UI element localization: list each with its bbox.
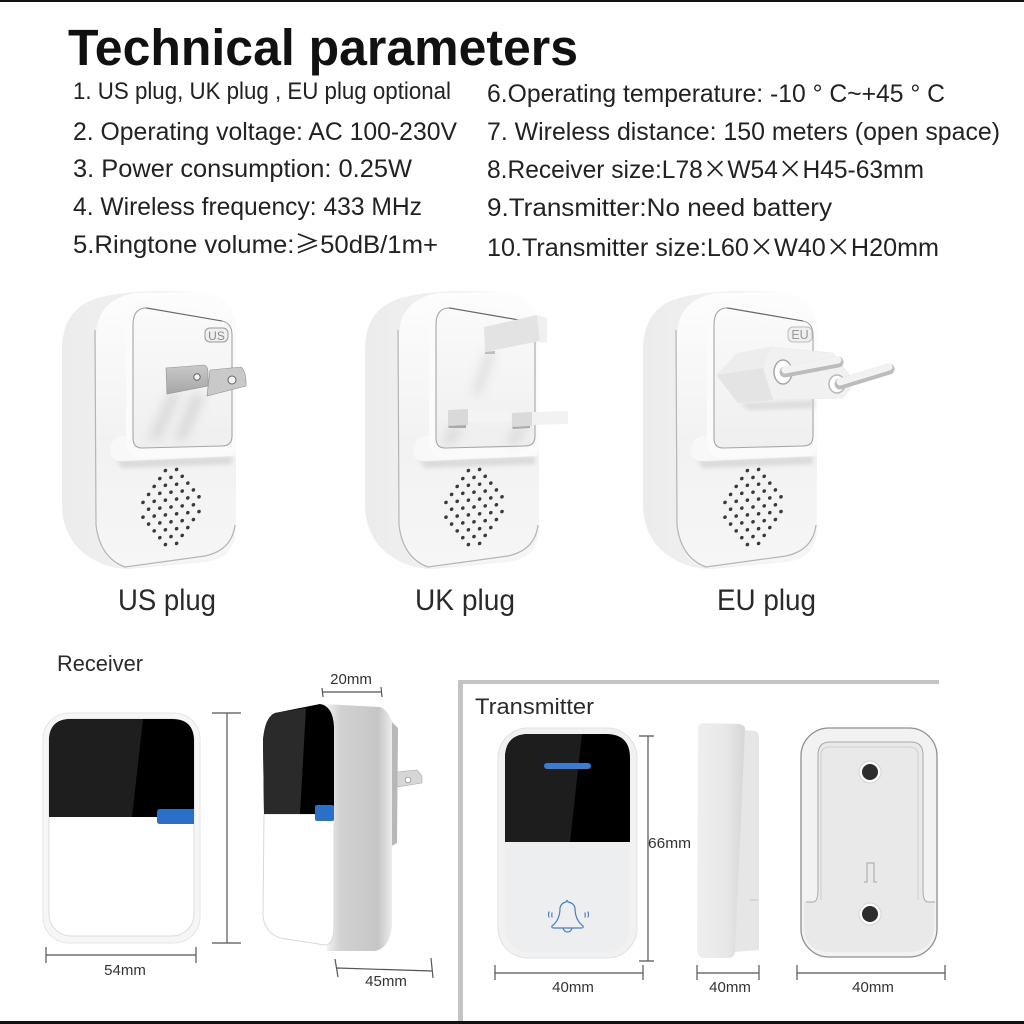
receiver: side view bbox=[263, 704, 422, 951]
pins bbox=[785, 360, 889, 384]
dimension: 66mm height: 66mm bbox=[648, 835, 691, 852]
badge: EU: EU bbox=[791, 328, 809, 342]
top border line bbox=[0, 0, 1024, 2]
prongs: three UK blades bbox=[448, 315, 568, 429]
black display panel bbox=[49, 719, 194, 817]
transmitter: front view bbox=[498, 728, 637, 958]
prong bbox=[397, 770, 422, 787]
parameters list: left column: 1. US plug, UK plug , EU plug optional bbox=[73, 78, 451, 105]
product photo: UK plug receiver bbox=[365, 291, 568, 569]
upper screw hole bbox=[859, 761, 881, 783]
heading: Transmitter: Transmitter bbox=[475, 694, 594, 719]
blue indicator bbox=[157, 809, 194, 824]
mounting plate bbox=[804, 742, 934, 952]
parameters list: left column: 2. Operating voltage: AC 100-230V bbox=[73, 118, 457, 146]
prongs: flat US blades bbox=[166, 365, 246, 396]
blue LED bar bbox=[544, 763, 591, 769]
product photo: EU plug receiver bbox=[643, 291, 889, 569]
black display panel bbox=[505, 734, 630, 842]
front face lower white bbox=[263, 814, 334, 945]
side housing bbox=[323, 704, 392, 951]
badge: US: US bbox=[208, 329, 225, 343]
rear plug housing bbox=[388, 718, 398, 848]
parameters list: right column: 7. Wireless distance: 150 meters (open space) bbox=[487, 118, 1000, 146]
transmitter: side view bbox=[697, 723, 759, 958]
plug shadow bbox=[740, 400, 815, 410]
label: US plug: US plug bbox=[118, 584, 216, 617]
transmitter: back view bbox=[801, 728, 937, 957]
parameters list: right column: 9.Transmitter:No need battery bbox=[487, 194, 833, 222]
prong shadows bbox=[148, 391, 206, 440]
black display bbox=[263, 704, 334, 814]
dimension: transmitter side 40mm bbox=[697, 965, 759, 996]
badge: EU bbox=[788, 327, 812, 342]
dimension: transmitter back 40mm: 40mm bbox=[852, 979, 894, 996]
parameters list: right column: 8.Receiver size:L78×W54×H45-63mm bbox=[487, 150, 924, 186]
plug body: EU two-pin bbox=[716, 347, 889, 403]
orientation mark bbox=[864, 863, 877, 882]
parameters list: right column: 6.Operating temperature: -10 ° C~+45 ° C bbox=[487, 80, 945, 108]
dimension: 54mm width: 54mm bbox=[104, 962, 146, 979]
parameters list: left column: 3. Power consumption: 0.25W bbox=[73, 155, 412, 183]
icon: bell bbox=[548, 900, 588, 932]
lower screw hole bbox=[859, 903, 881, 925]
dimension: transmitter side 40mm: 40mm bbox=[709, 979, 751, 996]
parameters list: right column bbox=[487, 80, 1000, 264]
label: EU plug: EU plug bbox=[717, 584, 816, 617]
dimension: 20mm depth: 20mm bbox=[330, 671, 372, 688]
parameters list: left column: 4. Wireless frequency: 433 MHz bbox=[73, 193, 422, 221]
dimension: 45mm depth bbox=[335, 958, 433, 990]
dimension: transmitter front 40mm bbox=[495, 965, 643, 996]
parameters list: right column: 10.Transmitter size:L60×W40×H20mm bbox=[487, 228, 939, 264]
parameters list: left column bbox=[73, 78, 457, 261]
dimension: transmitter back 40mm bbox=[797, 965, 945, 996]
badge: US bbox=[205, 328, 228, 343]
dimension: 45mm depth: 45mm bbox=[365, 973, 407, 990]
heading: Receiver: Receiver bbox=[57, 651, 143, 676]
dimension: 54mm width bbox=[46, 947, 196, 979]
dimension: transmitter front 40mm: 40mm bbox=[552, 979, 594, 996]
bottom border line bbox=[0, 1021, 1024, 1024]
parameters list: left column: 5.Ringtone volume:≥50dB/1m+ bbox=[73, 225, 438, 261]
label: UK plug: UK plug bbox=[415, 584, 515, 617]
dimension: receiver height bbox=[212, 713, 241, 943]
transmitter panel frame bbox=[458, 680, 939, 1021]
dimension: 66mm height bbox=[639, 736, 691, 961]
dimension: 20mm depth bbox=[322, 671, 382, 697]
prong shadows bbox=[442, 352, 530, 445]
title: Technical parameters bbox=[68, 19, 578, 76]
receiver: front view bbox=[43, 713, 200, 943]
product photo: US plug receiver bbox=[62, 291, 246, 569]
blue indicator bbox=[315, 805, 334, 821]
